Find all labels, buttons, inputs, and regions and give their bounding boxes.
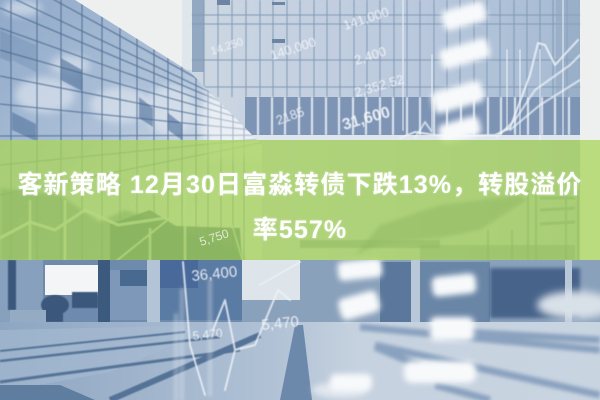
stock line chart overlays and numerals: 31,600 bbox=[340, 104, 392, 134]
right office tower bbox=[182, 0, 580, 262]
stock line chart overlays and numerals: 14,250 bbox=[209, 36, 245, 58]
stock line chart overlays and numerals: 36,400 bbox=[191, 263, 238, 285]
green translucent title band bbox=[0, 140, 600, 260]
faint chart numeral in band: 5,750 bbox=[198, 226, 231, 249]
lower building facade and entrance bbox=[0, 260, 600, 328]
title bbox=[17, 170, 583, 244]
ground with perspective stripes bbox=[0, 322, 600, 400]
left glass building bbox=[0, 0, 257, 260]
stock line chart overlays and numerals: 2,352.52 bbox=[353, 72, 405, 100]
stock line chart overlays and numerals: 2185 bbox=[274, 104, 306, 128]
stock line chart overlays and numerals: 2,400 bbox=[352, 44, 388, 68]
stock line chart overlays and numerals bbox=[176, 0, 580, 400]
stock line chart overlays and numerals: 5,470 bbox=[192, 326, 224, 343]
title: 客新策略 12月30日富淼转债下跌13%，转股溢价 bbox=[17, 171, 583, 199]
stock line chart overlays and numerals: 141,000 bbox=[341, 4, 391, 33]
stock line chart overlays and numerals: 140,000 bbox=[268, 34, 318, 63]
title: 率557% bbox=[253, 216, 347, 244]
shapes showing through the green band bbox=[0, 140, 600, 262]
stock line chart overlays and numerals: 5,470 bbox=[261, 313, 300, 334]
